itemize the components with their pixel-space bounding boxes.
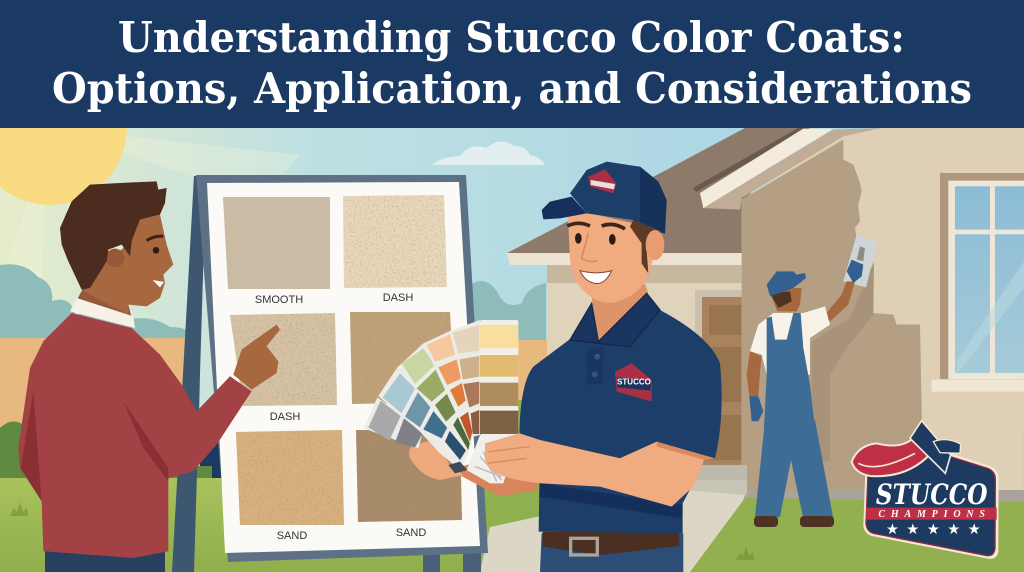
sun rays [0, 128, 300, 320]
background: sky [0, 128, 1024, 428]
paint colour fan [364, 320, 518, 483]
contractor: left hand [409, 440, 463, 480]
house: front section wall [547, 262, 747, 494]
worker: trowel [843, 235, 877, 287]
contractor: nose [582, 233, 597, 262]
worker: lowered arm [747, 351, 762, 396]
customer: pointing hand [233, 325, 280, 390]
swatch: rough dash [350, 312, 455, 404]
contractor: polo shirt [519, 293, 722, 533]
logo: stars: ★★★★★ [886, 521, 981, 538]
contractor: shirt logo [615, 363, 652, 402]
customer: collar [70, 298, 135, 328]
fan strip: blue [378, 367, 468, 473]
house: foundation [742, 490, 1024, 502]
customer [18, 181, 280, 572]
logo: badge shield [866, 442, 995, 556]
cloud [432, 141, 545, 165]
contractor [409, 162, 722, 572]
fan strip: tan [480, 320, 518, 435]
grass tuft left [10, 502, 28, 516]
logo: red swoosh [852, 437, 929, 476]
contractor: shirt shade [539, 483, 683, 518]
worker: shirt [750, 306, 830, 375]
customer: smile [153, 280, 164, 287]
title line 1: Understanding Stucco Color Coats: [118, 13, 905, 62]
title bar [0, 0, 1024, 128]
fan strip: grey [364, 397, 423, 448]
contractor: trousers [540, 533, 683, 572]
board: lower legs [423, 552, 481, 572]
worker: lower glove [749, 396, 763, 421]
wall: unfinished patch [742, 140, 923, 495]
bush right [985, 453, 1024, 526]
contractor: smile [580, 271, 612, 283]
fan: base fold [467, 435, 518, 483]
middle lawn [480, 400, 550, 530]
contractor right arm and hand [485, 433, 715, 507]
swatch: sand 2: SAND [396, 527, 426, 539]
contractor: cap [542, 162, 667, 233]
board: panel [207, 182, 480, 553]
house: steps [685, 465, 747, 495]
fan strip: green [397, 343, 472, 453]
fence right section [505, 340, 550, 440]
swatch: sand 1: SAND [277, 530, 307, 542]
finger lines [488, 447, 530, 463]
Stucco Champions logo [852, 421, 999, 559]
cap side panel [640, 167, 667, 233]
worker: glove [847, 260, 863, 283]
cap crown [570, 162, 667, 233]
title line 2: Options, Application, and Considerations [52, 64, 972, 113]
swatch: dash 2: DASH [270, 411, 300, 423]
wall: worker shadow [812, 261, 874, 461]
swatch: dash 2 [230, 313, 337, 423]
worker: cap [767, 271, 806, 296]
sample board [172, 175, 488, 572]
contractor: eyebrows [567, 223, 625, 229]
wall: white fascia [700, 129, 833, 208]
house: dark ridge line [693, 128, 810, 192]
customer: eye and brow [147, 236, 163, 254]
contractor: neck [592, 283, 648, 343]
logo: trowel [910, 421, 961, 473]
fan strip: taupe [451, 320, 480, 437]
wall: soffit [702, 128, 882, 210]
logo: badge outer edge [863, 438, 999, 559]
worker: head [770, 288, 802, 311]
house: door [695, 290, 747, 470]
contractor: belt and buckle [543, 532, 679, 555]
house: eave trim [507, 253, 745, 265]
right lawn [690, 498, 1024, 572]
contractor: hair [630, 220, 665, 273]
swatch: dash 1: DASH [383, 292, 413, 304]
fence [0, 338, 200, 473]
hedge [0, 421, 212, 478]
walkway [480, 480, 745, 572]
customer: face [83, 215, 173, 315]
contractor: ear [646, 230, 664, 260]
contractor: shirt logo: STUCCO [617, 377, 651, 386]
contractor: face [568, 208, 663, 303]
worker: legs [755, 420, 833, 517]
swatch: sand 2 [356, 430, 462, 539]
wall: finished stucco [742, 128, 1024, 495]
swatch: sand 1 [236, 430, 344, 542]
background trees right [470, 281, 546, 340]
arm and hand shape [485, 433, 705, 507]
cap logo [588, 169, 617, 193]
lawn [0, 478, 1024, 572]
contractor: eyes [575, 233, 616, 245]
customer: sweater shading [21, 391, 168, 501]
customer: neck [72, 288, 132, 318]
cap brim [542, 197, 587, 219]
customer: trousers [45, 550, 165, 572]
swatch: smooth [223, 197, 330, 306]
contractor: lower forearm [450, 460, 540, 497]
contractor: collar [570, 293, 660, 347]
worker: overalls bib [764, 313, 815, 428]
worker: boots [754, 516, 834, 527]
customer: ear [106, 249, 124, 267]
window [932, 173, 1024, 392]
sleeve cuff [657, 442, 715, 460]
house [507, 128, 1024, 502]
worker: upper body [747, 235, 877, 428]
customer: sweater [18, 313, 252, 558]
board: frame [196, 175, 488, 562]
swatch: smooth: SMOOTH [255, 294, 303, 306]
house: main wall [700, 128, 1024, 495]
background trees left [0, 264, 190, 347]
logo: swoosh highlight [858, 453, 915, 467]
customer: hair [60, 181, 167, 290]
logo: champions ribbon: CHAMPIONS [878, 509, 985, 520]
sun [0, 51, 127, 205]
board: A-frame leg [172, 176, 206, 572]
worker: raised arm [825, 281, 855, 321]
house: wall band [547, 265, 747, 283]
worker: hair [770, 291, 792, 308]
title background [0, 0, 1024, 128]
fan strip: orange [423, 331, 473, 443]
worker applying stucco [747, 235, 877, 527]
logo: wordmark: STUCCO [876, 478, 988, 511]
house: back roof [507, 128, 805, 256]
contractor: placket [587, 347, 603, 385]
swatch: dash 1 [343, 195, 447, 304]
grass tuft right [736, 547, 754, 560]
